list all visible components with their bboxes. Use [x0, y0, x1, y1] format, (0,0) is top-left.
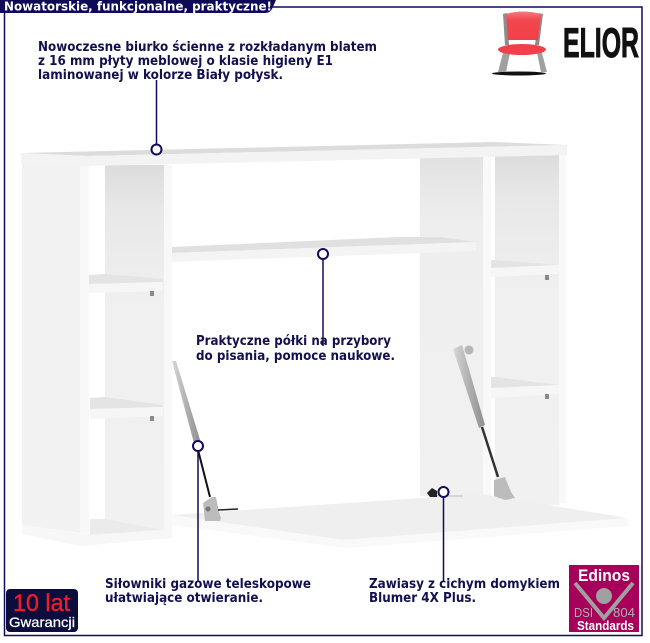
badge: Edinos standards: Standards: [577, 618, 634, 633]
callout: shelves: Praktyczne półki na przybory: [196, 334, 391, 349]
fold-down desk top: [172, 494, 628, 540]
left side panel: [22, 160, 80, 533]
furniture: wall desk: [21, 142, 628, 548]
callout: shelves: do pisania, pomoce naukowe.: [196, 349, 395, 364]
callout: top board: [38, 40, 377, 154]
callout: shelves: [196, 249, 395, 364]
icon: chair: [492, 12, 547, 76]
badge: Edinos standards: 804: [613, 605, 635, 620]
bottom board: [90, 519, 172, 535]
right shelves: [491, 260, 559, 268]
right inner panels: [420, 156, 483, 496]
badge: 10 years warranty: 10 lat: [13, 590, 70, 617]
middle shelf: [172, 237, 476, 253]
callout: hinges: Blumer 4X Plus.: [369, 591, 476, 606]
hinge: [427, 488, 463, 497]
top board: [21, 142, 567, 156]
badge: Edinos standards: Edinos: [578, 566, 630, 585]
badge: Edinos standards: DSI: [574, 605, 593, 620]
callout: top board: laminowanej w kolorze Biały połysk.: [38, 68, 283, 83]
callout: gas struts: [105, 441, 311, 606]
callout: gas struts: ułatwiające otwieranie.: [105, 591, 263, 606]
left gas strut: [172, 361, 238, 521]
badge: Edinos standards: [569, 565, 639, 633]
left inner panel: [105, 165, 164, 530]
logo: Elior chair: [492, 12, 639, 76]
callout: top board: z 16 mm płyty meblowej o klasie higieny E1: [38, 54, 333, 69]
badge: 10 years warranty: Gwarancji: [9, 614, 75, 630]
callout: hinges: Zawiasy z cichym domykiem: [369, 577, 560, 592]
callout: gas struts: Siłowniki gazowe teleskopowe: [105, 577, 311, 592]
callout: hinges: [369, 487, 560, 606]
right gas strut: [453, 345, 515, 500]
left shelves: [89, 274, 163, 284]
callout: top board: Nowoczesne biurko ścienne z rozkładanym blatem: [38, 40, 377, 55]
shelf screws: [150, 275, 549, 421]
badge: 10 years warranty: [6, 589, 78, 632]
